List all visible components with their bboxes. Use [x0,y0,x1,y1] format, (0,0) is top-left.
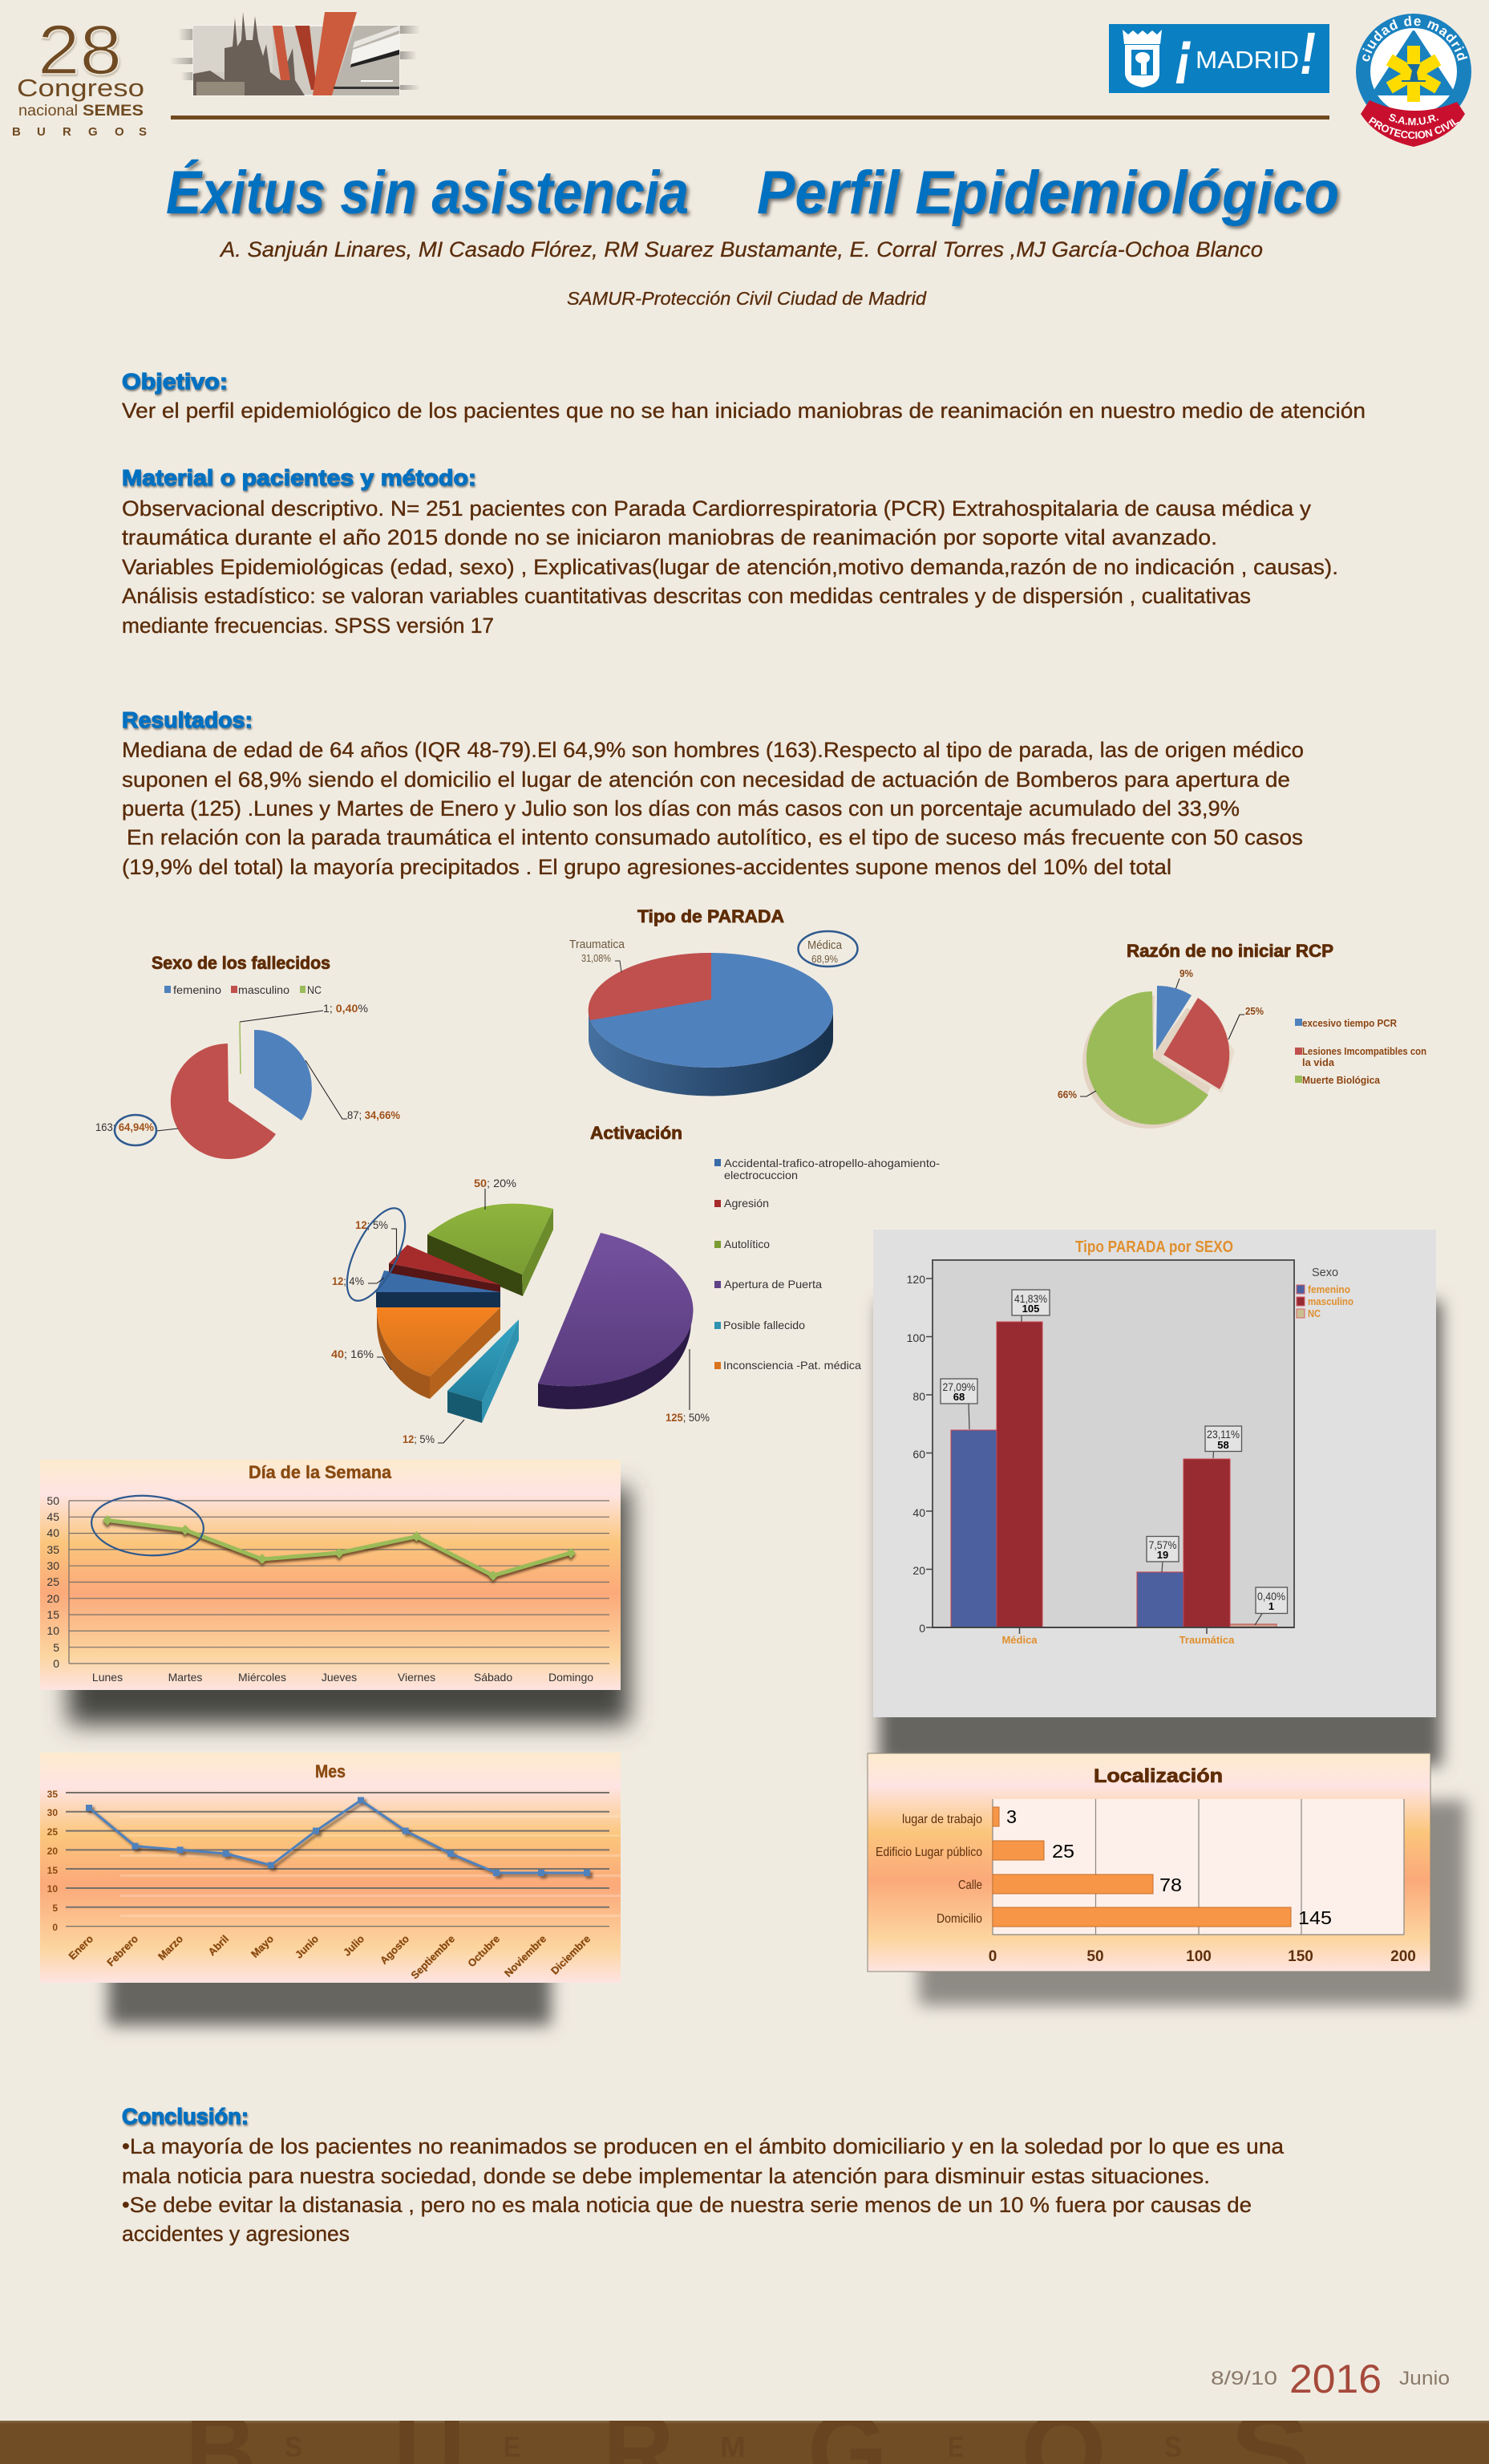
chart: tipo de parada: Médica [807,938,843,952]
footer band: BURGOS SEMES: E [948,2430,964,2463]
legend: razón: la vida [1302,1056,1335,1068]
legend: activación: Posible fallecido [723,1319,805,1331]
section: conclusión: •Se debe evitar la distanasia , pero no es mala noticia que de nuestra serie menos de un 10 % fuera por causas de [122,2193,1252,2217]
x labels: Noviembre [502,1933,548,1980]
chart: mes [40,1753,621,1983]
gridlines and y labels: 10 [47,1624,59,1637]
data labels: 23,11% [1207,1428,1240,1441]
chart: día de la semana: Día de la Semana [249,1462,392,1482]
gridlines and y labels: 25 [47,1575,59,1588]
chart: activación: 12; 5% [355,1218,388,1231]
line: casos por mes [86,1797,590,1876]
legend: sexo bar chart: NC [1308,1307,1321,1319]
bars: médica [951,1322,1042,1627]
chart: tipo de parada: Tipo de PARADA [637,906,784,926]
chart: razón de no iniciar RCP [1058,941,1426,1129]
logo: 28 Congreso SEMES Burgos: nacional [18,103,78,120]
gridlines and y labels: 30 [47,1559,59,1572]
gridlines and y labels: 35 [47,1543,59,1556]
date: 8/9/10 2016 Junio: Junio [1399,2368,1450,2389]
chart: sexo de los fallecidos: 163; 64,94% [95,1121,155,1133]
legend: activación [714,1157,940,1372]
footer band: BURGOS SEMES [0,2421,1489,2464]
section: material y método [122,465,1338,638]
values: 78 [1159,1874,1182,1895]
section: material y método: Variables Epidemiológicas (edad, sexo) , Explicativas(lugar de atención,motivo demanda,razón de no indicación , causas). [122,555,1338,579]
footer band: BURGOS SEMES: S [285,2430,302,2463]
chart: mes: Mes [315,1761,346,1781]
affiliation: SAMUR-Protección Civil Ciudad de Madrid [567,288,927,309]
shadow: día panel [68,1488,629,1724]
values: 3 [1006,1806,1017,1827]
data labels: 7,57% [1148,1538,1177,1551]
section: resultados: suponen el 68,9% siendo el domicilio el lugar de atención con necesidad de actuación de Bomberos para apertura de [122,768,1290,792]
category labels: Domicilio [937,1912,982,1926]
footer band: BURGOS SEMES: E [504,2430,520,2463]
y axis: 60 [912,1448,925,1461]
section: material y método: Material o pacientes y método: [122,465,476,490]
x labels: Mayo [249,1932,276,1960]
slice: inconsciencia [377,1307,500,1399]
date: 8/9/10 2016 Junio [1211,2357,1450,2401]
bars [993,1807,1291,1927]
x labels: Febrero [104,1932,140,1968]
gridlines and y labels: 45 [47,1510,59,1523]
data labels: 19 [1157,1549,1168,1561]
legend: razón: excesivo tiempo PCR [1302,1017,1398,1029]
chart: razón de no iniciar RCP: 66% [1058,1088,1077,1100]
header rule [171,116,1329,120]
y axis: 40 [912,1506,925,1519]
y axis: 20 [912,1564,925,1577]
section: resultados [122,707,1304,879]
data labels: 27,09% [943,1380,975,1393]
gridlines and y labels: 0 [52,1922,58,1933]
gridlines and y labels: 50 [47,1494,59,1507]
section: conclusión: •La mayoría de los pacientes no reanimados se producen en el ámbito domiciliario y en la soledad por lo que es una [122,2134,1285,2158]
title: Perfil Epidemiológico [757,159,1339,227]
chart: tipo parada por sexo: Médica [1001,1634,1038,1646]
title: Éxitus sin asistencia [166,159,689,227]
legend: activación: Autolítico [724,1238,770,1250]
gridlines and y labels: 15 [47,1608,59,1621]
logo: 28 Congreso SEMES Burgos: Congreso [17,74,144,102]
slice: accidental [376,1270,500,1307]
chart: localización: Localización [1094,1765,1223,1787]
x axis labels: 100 [1186,1948,1212,1965]
bars: traumática [1137,1459,1277,1627]
logo: Madrid: ¡ [1175,19,1193,87]
data labels: 41,83% [1014,1292,1047,1305]
title [166,159,1339,227]
image: Burgos cathedral banner [170,12,420,95]
section: objetivo [122,369,1366,423]
x axis labels: 0 [989,1948,997,1965]
footer band: BURGOS SEMES: M [720,2430,746,2463]
x labels: Sábado [474,1671,512,1684]
callout: circle around Médica [799,931,858,967]
data labels: 105 [1022,1303,1039,1315]
values: 25 [1052,1841,1074,1862]
legend: activación: Agresión [724,1197,769,1210]
x labels: Octubre [465,1933,502,1969]
values [1006,1806,1332,1928]
shadow: bar chart panel [879,1301,1442,1766]
logo: SAMUR Protección Civil: PROTECCION CIVIL [1368,117,1459,140]
chart: tipo de parada: 31,08% [581,952,611,964]
logo: Madrid: ! [1300,20,1316,87]
callout: circle around 64,94% [115,1115,156,1145]
y axis: 100 [907,1331,925,1344]
gridlines and y labels [47,1789,609,1933]
callout: circle around 12; 5% and 12; 4% [335,1200,417,1309]
chart: razón de no iniciar RCP: Razón de no iniciar RCP [1127,941,1333,961]
category labels: lugar de trabajo [902,1813,982,1826]
chart: activación: Activación [590,1123,682,1143]
callout: circle around Lunes y Martes [90,1492,205,1559]
gridlines and y labels: 40 [47,1526,59,1539]
logo: SAMUR Protección Civil: S.A.M.U.R. [1389,114,1438,125]
chart: tipo de parada: Traumatica [569,938,625,951]
section: conclusión: mala noticia para nuestra sociedad, donde se debe implementar la atención para disminuir estas situaciones. [122,2164,1210,2188]
chart: localización [868,1753,1430,1972]
x labels: Abril [206,1933,231,1958]
gridlines and y labels: 5 [53,1641,59,1654]
logo: Madrid: MADRID [1196,46,1299,74]
x labels: Martes [168,1671,202,1684]
slice: agresión [389,1245,500,1292]
gridlines and y labels: 20 [47,1592,59,1605]
x labels: Enero [66,1932,95,1962]
data labels: 0,40% [1257,1590,1285,1603]
x labels [92,1671,593,1684]
x labels [66,1932,593,1981]
date: 8/9/10 2016 Junio: 2016 [1289,2357,1382,2401]
x axis labels: 200 [1390,1948,1416,1965]
chart: activación: 12; 4% [332,1275,364,1287]
gridlines and y labels: 20 [47,1846,58,1857]
slice: apertura de puerta [538,1233,694,1409]
data labels: 1 [1268,1600,1274,1612]
data labels [941,1290,1288,1625]
data labels: 68 [953,1391,965,1403]
chart: activación [331,1123,940,1445]
x labels: Viernes [398,1671,435,1684]
section: material y método: Observacional descriptivo. N= 251 pacientes con Parada Cardiorrespiratoria (PCR) Extrahospitalaria de causa médica y [122,496,1312,521]
shadow: mes panel [108,1781,551,2025]
chart: día de la semana [40,1460,621,1690]
x labels: Lunes [92,1671,123,1684]
y axis: 120 [907,1273,925,1286]
section: resultados: (19,9% del total) la mayoría precipitados . El grupo agresiones-accidentes supone menos del 10% del total [122,855,1171,879]
x axis labels: 150 [1288,1948,1313,1965]
logo: 28 Congreso SEMES Burgos: BURGOS [12,125,147,139]
gridlines and y labels: 15 [47,1865,58,1876]
category labels: Calle [958,1878,982,1892]
y axis [907,1273,1207,1635]
x labels: Junio [293,1932,321,1961]
legend: sexo bar chart: femenino [1308,1283,1350,1295]
chart: tipo parada por sexo: Tipo PARADA por SEXO [1075,1238,1233,1256]
date: 8/9/10 2016 Junio: 8/9/10 [1211,2368,1277,2389]
legend: activación: Inconsciencia -Pat. médica [723,1359,861,1372]
legend: sexo: femenino [173,983,221,996]
icon: star of life [1386,46,1441,102]
legend: activación: Accidental-trafico-atropello-ahogamiento- [724,1157,940,1169]
legend: sexo: NC [307,983,322,996]
data labels: 58 [1217,1439,1229,1451]
gridlines and y labels [47,1494,609,1670]
section: objetivo: Ver el perfil epidemiológico de los pacientes que no se han iniciado maniobras de reanimación en nuestro medio de atención [122,399,1366,423]
logo: SAMUR Protección Civil: ciudad de madrid [1362,16,1467,61]
x labels: Diciembre [548,1933,593,1977]
chart: tipo de parada: 68,9% [811,953,838,965]
icon: Madrid coat of arms [1123,30,1162,87]
x labels: Domingo [548,1671,593,1684]
x labels: Miércoles [238,1671,286,1684]
chart: razón de no iniciar RCP: 9% [1179,967,1193,979]
logo: Madrid [1109,19,1329,93]
chart: activación: 125; 50% [666,1411,710,1424]
gridlines and y labels: 35 [47,1789,58,1800]
legend: razón: Lesiones Imcompatibles con [1302,1045,1426,1057]
x labels: Agosto [378,1932,411,1967]
section: resultados: En relación con la parada traumática el intento consumado autolítico, es el tipo de suceso más frecuente con 50 casos [127,825,1303,849]
logo: SAMUR Protección Civil [1356,14,1471,147]
gridlines and y labels: 5 [52,1903,58,1914]
x labels: Septiembre [408,1933,457,1981]
gridlines and y labels: 25 [47,1826,58,1838]
logo: 28 Congreso SEMES Burgos: 28 [38,11,122,89]
section: conclusión [122,2104,1285,2246]
section: conclusión: Conclusión: [122,2104,249,2129]
chart: sexo de los fallecidos: Sexo de los fallecidos [152,953,330,973]
section: material y método: Análisis estadístico: se valoran variables cuantitativas descritas con medidas centrales y de dispersión , cualitativas [122,584,1251,608]
section: material y método: traumática durante el año 2015 donde no se iniciaron maniobras de reanimación por soporte vital avanzado. [122,525,1217,549]
chart: razón de no iniciar RCP: 25% [1245,1005,1264,1017]
values: 145 [1298,1907,1332,1928]
y axis: 80 [912,1390,925,1403]
chart: sexo de los fallecidos [95,953,401,1159]
category labels: Edificio Lugar público [876,1846,982,1859]
slice: posible fallecido [447,1319,519,1423]
legend: sexo bar chart: masculino [1308,1295,1353,1307]
authors: A. Sanjuán Linares, MI Casado Flórez, RM Suarez Bustamante, E. Corral Torres ,MJ García-Ochoa Blanco [219,237,1263,261]
y axis: 0 [919,1622,925,1635]
category labels [876,1813,982,1926]
x axis labels: 50 [1086,1948,1104,1965]
footer band: BURGOS SEMES: S [1164,2430,1182,2463]
legend: razón [1295,1017,1426,1086]
section: resultados: Mediana de edad de 64 años (IQR 48-79).El 64,9% son hombres (163).Respecto al tipo de parada, las de origen médico [122,738,1304,762]
chart: activación: 40; 16% [331,1348,374,1360]
x labels: Jueves [322,1671,357,1684]
legend: sexo: masculino [238,983,289,996]
chart: sexo de los fallecidos: 87; 34,66% [347,1108,401,1121]
chart: sexo de los fallecidos: 1; 0,40% [323,1002,368,1015]
line: casos por día [103,1515,576,1581]
legend: sexo [164,983,322,996]
x labels: Marzo [156,1932,185,1963]
legend: sexo bar chart: Sexo [1312,1266,1338,1279]
section: material y método: mediante frecuencias. SPSS versión 17 [122,614,494,638]
chart: activación: 50; 20% [474,1177,516,1189]
chart: tipo parada por sexo [873,1230,1436,1717]
legend: activación: electrocuccion [724,1169,798,1181]
x labels: Julio [341,1932,366,1959]
gridlines and y labels: 0 [53,1657,59,1670]
logo: 28 Congreso SEMES Burgos [12,11,147,139]
x axis labels [989,1948,1416,1965]
section: objetivo: Objetivo: [122,369,228,394]
section: resultados: puerta (125) .Lunes y Martes de Enero y Julio son los días con más casos con un porcentaje acumulado del 33,9% [122,796,1240,821]
legend: razón: Muerte Biológica [1302,1074,1381,1086]
slice: autolítico [427,1204,553,1296]
chart: tipo parada por sexo: Traumática [1179,1634,1235,1646]
gridlines and y labels: 10 [47,1883,58,1895]
shadow: localización panel [919,1801,1466,2005]
logo: 28 Congreso SEMES Burgos: SEMES [83,103,144,120]
section: resultados: Resultados: [122,707,253,732]
legend: sexo bar chart [1297,1266,1353,1319]
section: conclusión: accidentes y agresiones [122,2222,350,2246]
chart: activación: 12; 5% [403,1433,435,1445]
legend: activación: Apertura de Puerta [724,1278,822,1291]
gridlines and y labels: 30 [47,1807,58,1818]
chart: tipo de parada [569,906,858,1096]
